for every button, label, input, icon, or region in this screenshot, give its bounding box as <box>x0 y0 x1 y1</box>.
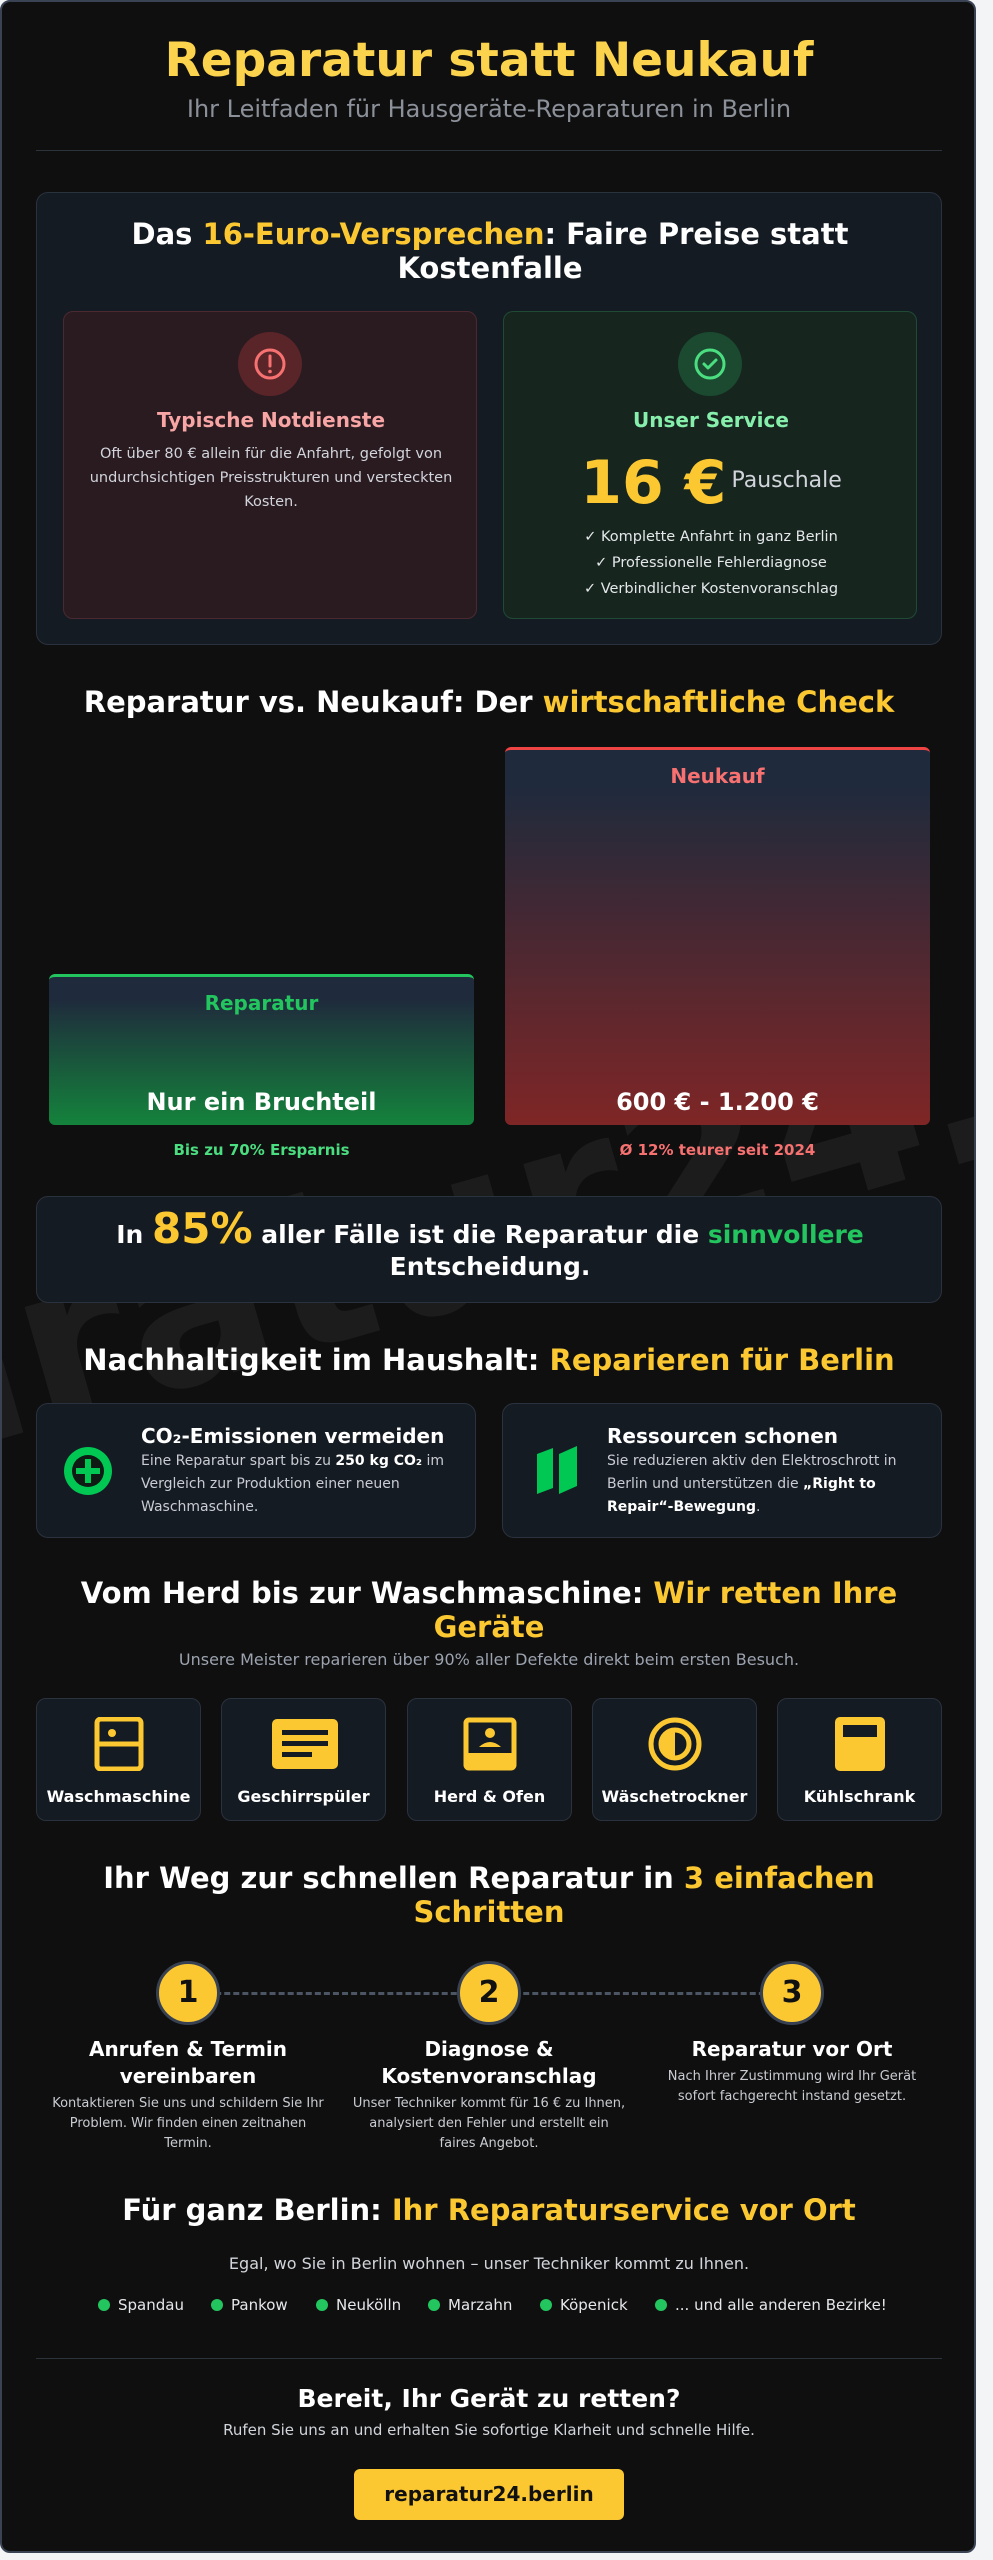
text: Kostenvoranschlag <box>381 2064 597 2088</box>
CTA heading: Bereit, Ihr Gerät zu retten? <box>298 2384 680 2413</box>
appliance: fridge <box>777 1698 942 1821</box>
text: Diagnose & <box>424 2037 554 2061</box>
heading: 3 steps: Ihr Weg zur schnellen Reparatur in 3 einfachen <box>103 1861 875 1895</box>
appliance: washing machine: Waschmaschine <box>47 1787 190 1806</box>
step 2: 2 <box>479 1975 499 2010</box>
text: Ressourcen schonen <box>607 1424 838 1448</box>
bar: Reparatur: Reparatur <box>205 991 318 1015</box>
heading: economic check: Reparatur vs. Neukauf: Der wirtschaftliche Check <box>84 685 894 719</box>
bar: Neukauf: Neukauf <box>670 764 765 788</box>
appliance: dishwasher <box>221 1698 386 1821</box>
checklist: ✓ Professionelle Fehlerdiagnose <box>595 555 827 571</box>
appliance: fridge: Kühlschrank <box>804 1787 915 1806</box>
bar: Reparatur: Nur ein Bruchteil <box>146 1088 377 1116</box>
text: Kontaktieren Sie uns und schildern Sie Ihr Problem. Wir finden einen zeitnahen Termin. <box>52 2096 324 2151</box>
text: Eine Reparatur spart bis zu 250 kg CO₂ im Vergleich zur Produktion einer neuen Waschmaschine. <box>141 1453 444 1515</box>
text: anywhere in Berlin: Egal, wo Sie in Berlin wohnen – unser Techniker kommt zu Ihnen. <box>229 2254 749 2273</box>
title: Reparatur statt Neukauf <box>165 33 813 88</box>
text: Anrufen & Termin <box>89 2037 287 2061</box>
checklist: ✓ Verbindlicher Kostenvoranschlag <box>584 581 838 597</box>
step 1: 1 <box>178 1975 198 2010</box>
district list: Marzahn <box>448 2296 512 2314</box>
heading: sustainability: Nachhaltigkeit im Haushalt: Reparieren für Berlin <box>83 1343 895 1377</box>
steps connector <box>188 1992 792 1995</box>
panel: resources <box>502 1403 942 1538</box>
appliance: washing machine <box>36 1698 201 1821</box>
heading: appliances <box>80 1576 897 1644</box>
bar: Neukauf <box>505 747 930 1125</box>
bar: Neukauf: 600 € - 1.200 € <box>616 1088 819 1116</box>
price: 16 € Pauschale <box>580 448 842 518</box>
icon: warning <box>238 332 302 396</box>
text <box>607 1424 897 1515</box>
step 3: 3 <box>782 1975 802 2010</box>
panel heading <box>132 217 848 285</box>
heading: Unser Service <box>633 408 789 432</box>
district list: Pankow <box>231 2296 288 2314</box>
callout: 85%: In 85% aller Fälle ist die Reparatur die sinnvollere <box>116 1204 864 1253</box>
bar: Reparatur <box>49 974 474 1125</box>
text <box>141 1424 444 1515</box>
district list: Neukölln <box>336 2296 401 2314</box>
icon: plus circle <box>64 1447 112 1495</box>
district list: ... und alle anderen Bezirke! <box>675 2296 887 2314</box>
panel heading: Kostenfalle <box>397 251 583 285</box>
CTA text: Rufen Sie uns an und erhalten Sie sofortige Klarheit und schnelle Hilfe. <box>223 2421 755 2439</box>
checklist <box>584 529 838 597</box>
text: Reparatur vor Ort <box>692 2037 892 2061</box>
heading: Typische Notdienste <box>157 408 385 432</box>
text: CO₂-Emissionen vermeiden <box>141 1424 444 1448</box>
text: Sie reduzieren aktiv den Elektroschrott in Berlin und unterstützen die „Right to Repair“-Bewegung. <box>607 1453 897 1515</box>
text: Unser Techniker kommt für 16 € zu Ihnen, analysiert den Fehler und erstellt ein faires Angebot. <box>353 2096 625 2151</box>
bar chart <box>49 747 930 1159</box>
appliance: stove: Herd & Ofen <box>434 1787 545 1806</box>
appliance: dishwasher: Geschirrspüler <box>237 1787 370 1806</box>
text: vereinbaren <box>120 2064 256 2088</box>
CTA button: reparatur24.berlin <box>384 2482 594 2506</box>
text: Oft über 80 € allein für die Anfahrt, gefolgt von undurchsichtigen Preisstrukturen und versteckten Kosten. <box>90 446 452 510</box>
panel heading: Das 16-Euro-Versprechen: Faire Preise statt <box>132 217 848 251</box>
district list: Spandau <box>118 2296 184 2314</box>
step 3 <box>760 1961 824 2025</box>
heading: appliances: Geräte <box>434 1610 544 1644</box>
panel: 16-euro promise <box>36 192 942 645</box>
bar caption: savings: Bis zu 70% Ersparnis <box>173 1141 350 1159</box>
district list: Köpenick <box>560 2296 628 2314</box>
bar caption: price rise: Ø 12% teurer seit 2024 <box>620 1141 815 1159</box>
callout: 85%: Entscheidung. <box>390 1252 590 1281</box>
step 2 <box>457 1961 521 2025</box>
icon: check <box>678 332 742 396</box>
checklist: ✓ Komplette Anfahrt in ganz Berlin <box>584 529 838 545</box>
card: our service <box>503 311 917 619</box>
heading: 3 steps <box>103 1861 875 1929</box>
heading: 3 steps: Schritten <box>413 1895 564 1929</box>
icon: leaves <box>537 1446 577 1494</box>
panel: CO2 <box>36 1403 476 1538</box>
appliance: dryer <box>592 1698 757 1821</box>
callout: 85% <box>36 1196 942 1303</box>
subtitle: Ihr Leitfaden für Hausgeräte-Reparaturen in Berlin <box>187 95 791 123</box>
card: typical emergency services <box>63 311 477 619</box>
heading: all of Berlin: Für ganz Berlin: Ihr Reparaturservice vor Ort <box>122 2193 856 2227</box>
subheading: Unsere Meister reparieren über 90% aller Defekte direkt beim ersten Besuch. <box>179 1650 799 1669</box>
CTA button <box>354 2469 624 2520</box>
heading: appliances: Vom Herd bis zur Waschmaschine: Wir retten Ihre <box>81 1576 897 1610</box>
appliance: dryer: Wäschetrockner <box>602 1787 747 1806</box>
appliance: stove <box>407 1698 572 1821</box>
text: Nach Ihrer Zustimmung wird Ihr Gerät sofort fachgerecht instand gesetzt. <box>668 2069 916 2104</box>
step 1 <box>156 1961 220 2025</box>
